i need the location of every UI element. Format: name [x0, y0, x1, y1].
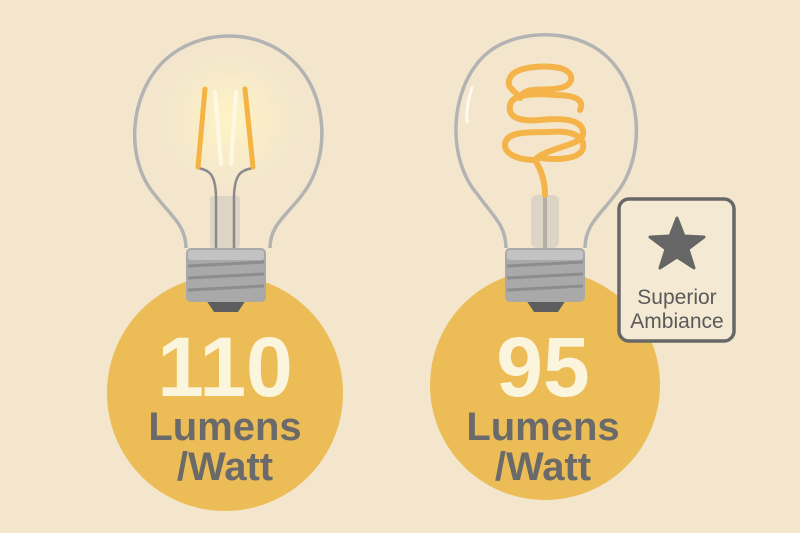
label: Lumens /Watt right: Lumens: [466, 405, 620, 449]
label: Lumens /Watt left: Lumens: [148, 405, 302, 449]
badge: Superior Ambiance: Superior: [637, 286, 717, 309]
label: Lumens /Watt right: /Watt: [495, 445, 591, 489]
value: 95: 95: [496, 320, 590, 414]
panel: right bulb 95 lumens: [430, 35, 660, 500]
icon: star: [650, 218, 704, 268]
icon: filament bulb left: [135, 36, 322, 312]
badge: Superior Ambiance: [619, 199, 734, 341]
value: 110: 110: [157, 320, 293, 414]
label: Lumens /Watt left: /Watt: [177, 445, 273, 489]
yellow circle left: [107, 275, 343, 511]
badge: Superior Ambiance: Ambiance: [630, 310, 724, 333]
icon: spiral filament bulb: [456, 35, 636, 312]
panel: left bulb 110 lumens: [107, 36, 343, 511]
yellow circle right: [430, 270, 660, 500]
